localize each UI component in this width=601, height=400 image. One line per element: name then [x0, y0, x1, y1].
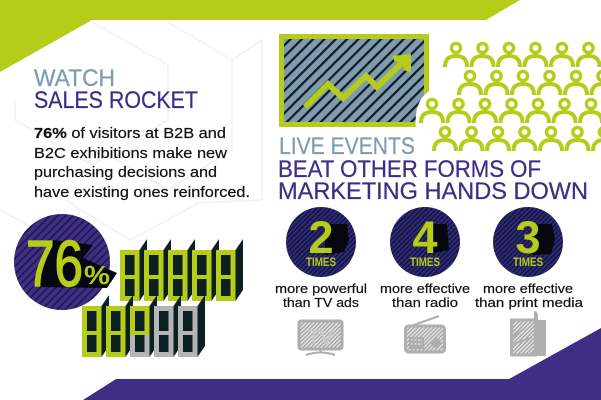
caption: tv: more powerful — [275, 281, 367, 296]
badge: 3 times: 3 — [515, 212, 541, 263]
badge: 76 percent: % — [84, 260, 110, 290]
background hexagon pattern — [0, 22, 262, 250]
text block: 76% of visitors — [34, 125, 250, 201]
icon: tv: TV — [308, 327, 334, 349]
chart: rising arrow — [282, 36, 431, 129]
badge: 3 times: TIMES — [513, 257, 543, 269]
caption: print media — [475, 281, 584, 310]
heading: live events: MARKETING HANDS DOWN — [278, 178, 588, 205]
heading: watch sales rocket: SALES ROCKET — [34, 87, 198, 114]
text block: 76% of visitors: purchasing decisions and — [34, 164, 217, 181]
top lime banner — [0, 0, 520, 72]
heading: live events: LIVE EVENTS — [279, 133, 415, 160]
icon: print media — [511, 311, 546, 356]
heading: watch sales rocket: WATCH — [34, 65, 115, 92]
heading: live events — [278, 133, 588, 205]
heading: watch sales rocket — [34, 65, 198, 114]
icon: tv — [299, 321, 342, 355]
badge: 2 times: 2 — [308, 212, 334, 263]
caption: radio: more effective — [380, 281, 470, 296]
badge: 76 percent: 76 — [26, 227, 83, 300]
text block: 76% of visitors: have existing ones reinforced. — [34, 184, 250, 201]
caption: print media: more effective — [483, 281, 573, 296]
badge: 4 times: TIMES — [410, 257, 440, 269]
text block: 76% of visitors: B2C exhibitions make new — [34, 145, 227, 162]
bottom purple banner — [83, 328, 601, 400]
badge: 3 times — [493, 207, 563, 277]
badge: 4 times — [390, 207, 460, 277]
badge: 2 times: TIMES — [306, 257, 336, 269]
caption: radio — [380, 281, 470, 310]
badge: 4 times: 4 — [412, 212, 438, 263]
badge: 2 times — [286, 207, 356, 277]
audience icons — [421, 43, 601, 151]
caption: tv — [275, 281, 367, 310]
pictogram: ten blocks, 76 percent filled — [82, 239, 243, 357]
icon: radio — [406, 316, 444, 352]
badge: 76 percent — [14, 214, 117, 310]
caption: radio: than radio — [392, 295, 458, 310]
caption: print media: than print media — [475, 295, 584, 310]
text block: 76% of visitors: 76% of visitors at B2B and — [34, 125, 226, 142]
caption: tv: than TV ads — [283, 295, 360, 310]
heading: live events: BEAT OTHER FORMS OF — [278, 156, 541, 183]
